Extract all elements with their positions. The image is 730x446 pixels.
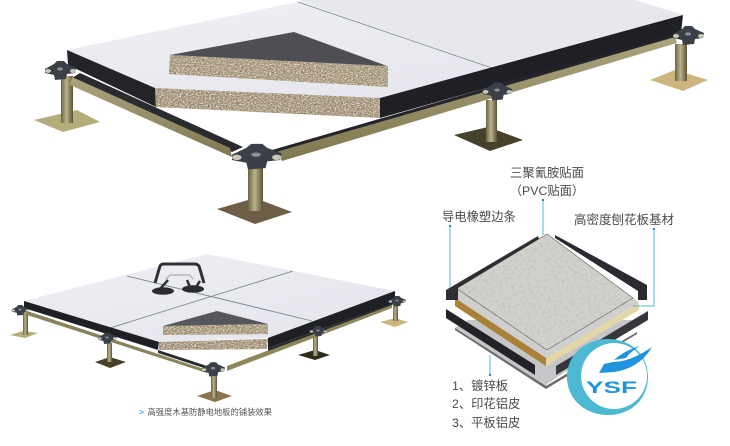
head: front centre — [232, 144, 282, 170]
pedestals — [10, 302, 408, 402]
particle board cut: upper — [169, 55, 388, 87]
black conductive edge: left — [67, 50, 156, 107]
logo crescent ring — [567, 339, 648, 415]
upper board cut — [163, 324, 268, 335]
logo wordmark: YSF — [586, 378, 637, 397]
small installed floor illustration — [10, 254, 408, 417]
leader lines — [450, 200, 654, 375]
logo swoosh — [599, 346, 652, 373]
icon: suction handle — [152, 264, 204, 295]
particle board: right face — [546, 303, 639, 366]
flat aluminium sheet and galvanised base plate — [455, 320, 640, 389]
caption: 高强度木基防静电地板的铺装效果 — [148, 407, 272, 417]
silver printed layer — [455, 236, 639, 358]
particle board: left face — [455, 298, 546, 366]
label: list: 1、镀锌板 — [452, 378, 508, 393]
melamine laminate top — [456, 234, 633, 350]
base plate right edge — [546, 332, 637, 389]
main raised floor illustration — [34, 0, 708, 224]
steel stringer rails — [70, 32, 680, 161]
floor panel top surface — [67, 0, 683, 98]
label: PVC: （PVC贴面） — [510, 184, 584, 198]
pedestal heads: left and right — [45, 26, 704, 100]
black edges — [24, 291, 395, 350]
pedestal: far left — [34, 76, 100, 132]
upper edge strip: left — [446, 236, 539, 300]
lower board cut — [159, 339, 268, 350]
label: list: 3、平板铝皮 — [452, 415, 520, 430]
particle board cut: lower — [155, 88, 380, 118]
label: list — [452, 378, 520, 430]
lower edge strip: left — [446, 309, 535, 375]
upper edge strip: right — [555, 235, 647, 300]
pedestal heads — [12, 296, 406, 376]
label: list: 2、印花铝皮 — [452, 396, 520, 411]
caption: > — [139, 407, 144, 417]
rails — [27, 303, 395, 373]
lower edge strip: right — [556, 311, 648, 375]
dark laminate triangle — [163, 311, 268, 326]
base plate bottom shadow — [455, 328, 546, 389]
panel surface — [24, 254, 395, 342]
logo white disc — [581, 343, 647, 409]
pedestal: far right — [650, 44, 708, 91]
panel seams — [110, 271, 312, 328]
exploded layer diagram — [442, 165, 674, 430]
label: conductive strip: 导电橡塑边条 — [442, 209, 516, 224]
logo: YSF — [567, 339, 652, 415]
dark laminate triangle — [170, 32, 387, 66]
black conductive edge: right — [380, 15, 683, 118]
pedestal: front centre — [217, 165, 292, 224]
leader dots — [449, 199, 655, 376]
second panel surface — [300, 0, 683, 68]
seam line — [298, 2, 492, 68]
label: particle board: 高密度刨花板基材 — [574, 212, 674, 227]
pedestal: right middle — [454, 100, 523, 151]
label: melamine: 三聚氰胺贴面 — [510, 165, 584, 180]
